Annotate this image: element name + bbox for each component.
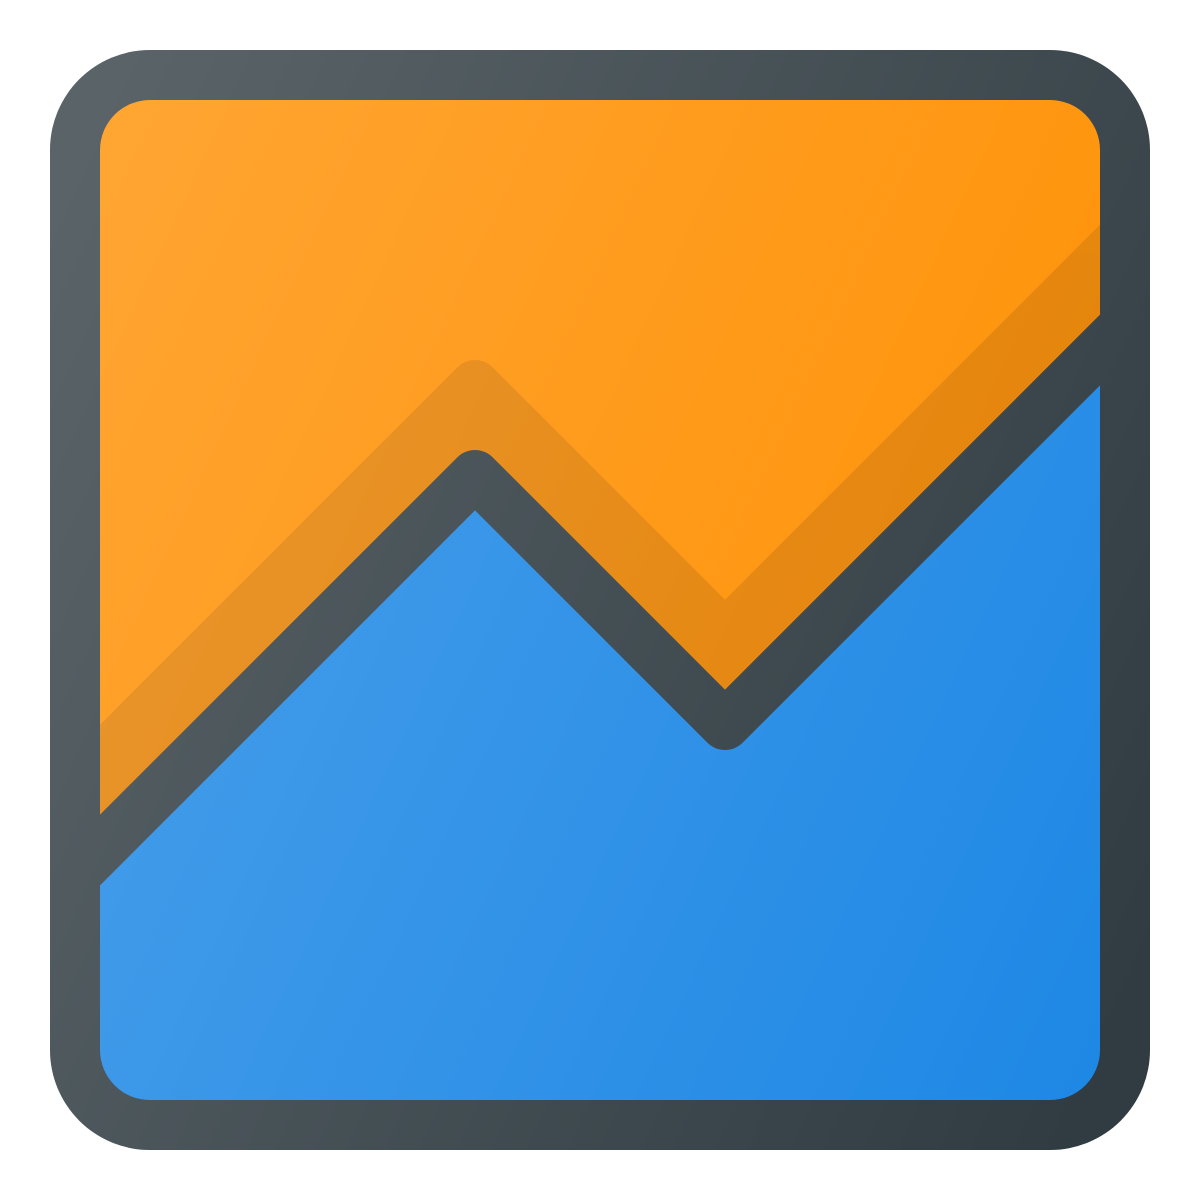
chart area: [100, 100, 1100, 1100]
orange upper area: [100, 100, 1100, 814]
blue lower area: [100, 386, 1100, 1100]
shadow band above line: [100, 225, 1100, 814]
dark chart line: [60, 310, 1140, 890]
